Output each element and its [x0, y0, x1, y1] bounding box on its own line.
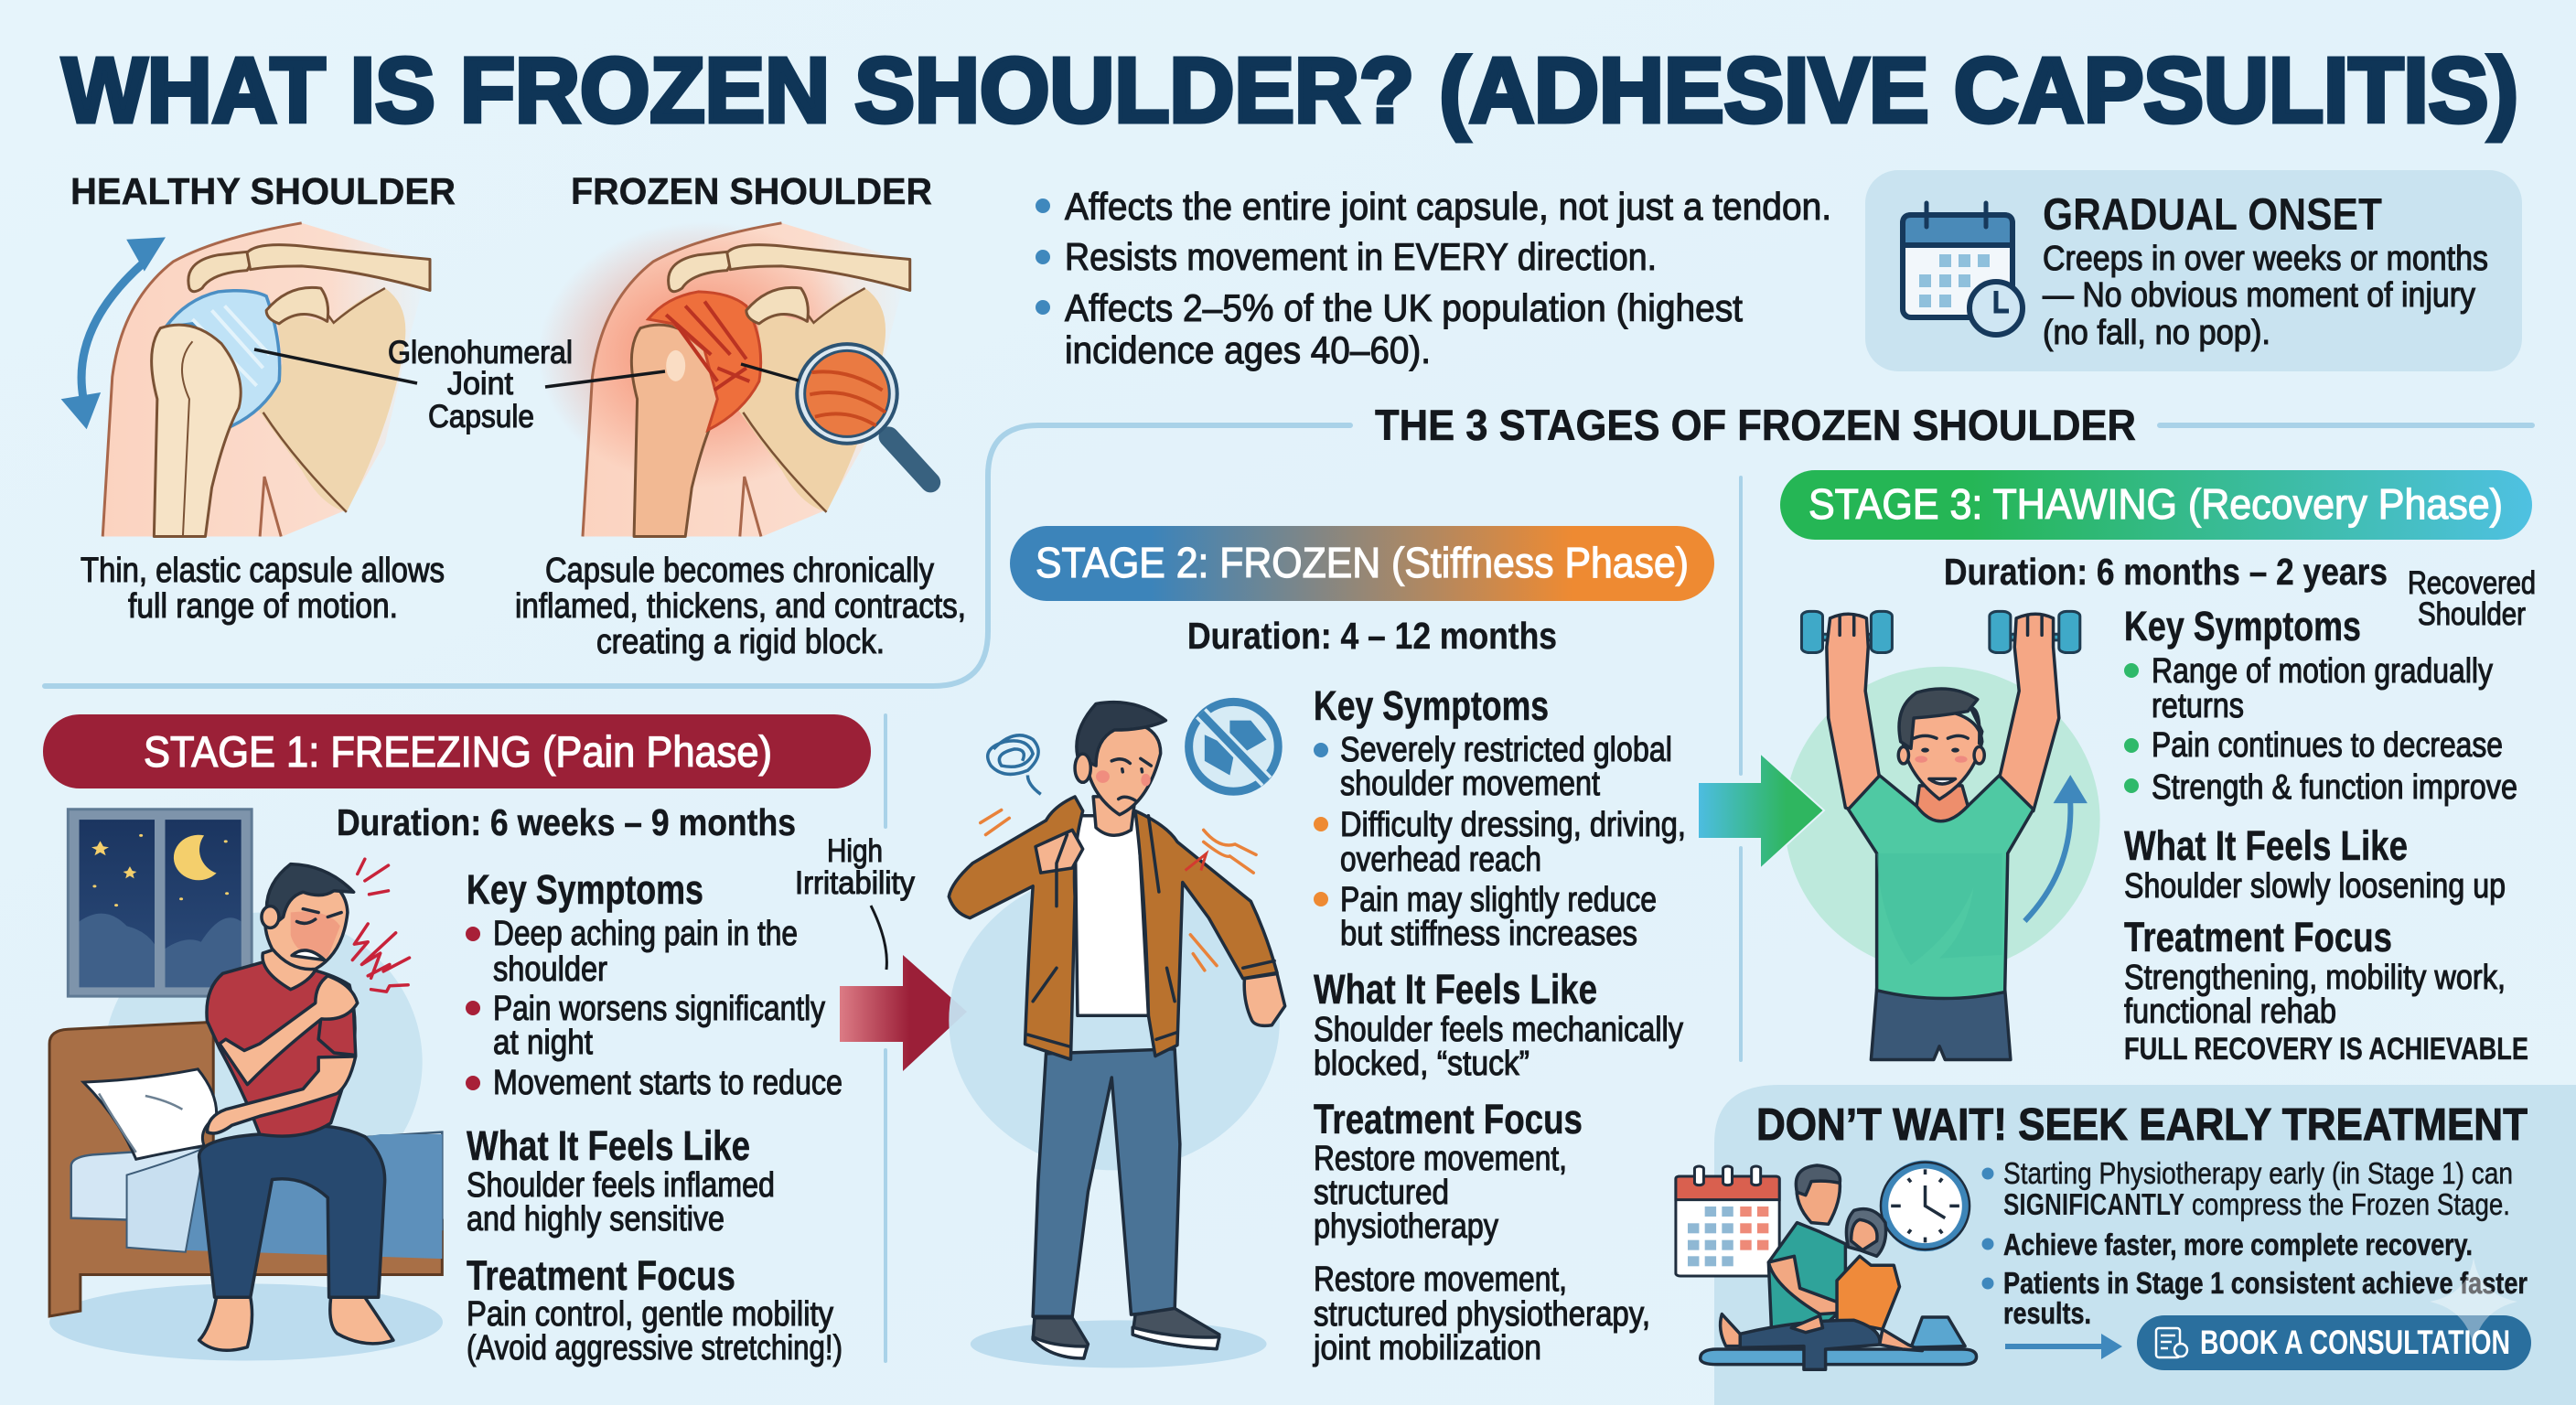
stage 3 what it feels like	[2124, 822, 2506, 906]
stage 3 treatment focus: Treatment Focus	[2124, 914, 2392, 960]
stage 2 treatment focus: Restore movement,	[1314, 1140, 1567, 1178]
label: glenohumeral joint capsule: Joint	[447, 366, 513, 402]
stage 3 treatment focus: Strengthening, mobility work,	[2124, 959, 2506, 997]
panel: gradual onset	[1865, 170, 2522, 371]
stage 1 what it feels like: What It Feels Like	[467, 1122, 750, 1169]
stage 1 key symptoms	[466, 866, 843, 1102]
panel: gradual onset: Creeps in over weeks or months	[2043, 240, 2488, 278]
button: book a consultation	[2137, 1315, 2531, 1370]
early treatment bullets: results.	[2003, 1296, 2091, 1330]
decorative sparkle mark	[2430, 1258, 2517, 1346]
panel: don't wait, seek early treatment	[1676, 1085, 2576, 1405]
key facts list: Resists movement in EVERY direction.	[1065, 235, 1657, 278]
stage 2 key symptoms: but stiffness increases	[1340, 915, 1637, 953]
panel: gradual onset: GRADUAL ONSET	[2043, 190, 2382, 240]
callout lines: capsule pointers	[254, 349, 799, 387]
stage 1 what it feels like	[467, 1122, 775, 1239]
stage 2 key symptoms	[1314, 682, 1686, 953]
stage 3 pill	[1780, 470, 2532, 540]
stage 2 key symptoms: Key Symptoms	[1314, 682, 1549, 729]
label: recovered shoulder: Recovered	[2408, 565, 2536, 601]
caption: frozen shoulder	[515, 552, 966, 661]
icon: magnifying glass	[797, 344, 930, 482]
stage 3 treatment focus	[2124, 914, 2528, 1067]
stage 2 treatment focus	[1313, 1096, 1650, 1367]
icon: clipboard	[2156, 1328, 2187, 1357]
stage 1 key symptoms: shoulder	[493, 950, 607, 989]
stage 2 key symptoms: Difficulty dressing, driving,	[1340, 806, 1686, 844]
label: recovered shoulder: Shoulder	[2418, 596, 2526, 632]
label: glenohumeral joint capsule	[388, 335, 573, 434]
heading: the 3 stages: THE 3 STAGES OF FROZEN SHOULDER	[1375, 401, 2136, 449]
key facts list: Affects 2–5% of the UK population (highest	[1065, 286, 1743, 329]
stage 1 duration: Duration: 6 weeks – 9 months	[337, 801, 796, 843]
stage 2 key symptoms: shoulder movement	[1340, 765, 1600, 803]
stage 1 key symptoms: at night	[493, 1024, 593, 1062]
panel frame: anatomy section divider	[45, 425, 2532, 686]
label: recovered shoulder	[2408, 565, 2536, 632]
early treatment bullets: compress the Frozen Stage.	[2192, 1187, 2510, 1221]
window	[68, 810, 252, 996]
stage 1 pill	[43, 714, 871, 788]
stage 3 key symptoms: Range of motion gradually	[2152, 652, 2493, 691]
stage 1 key symptoms: Movement starts to reduce	[493, 1064, 843, 1102]
stiffness marks	[981, 810, 1256, 971]
icon: upward motion arrow	[2024, 775, 2088, 921]
arrow: stage 1 to stage 2	[840, 955, 967, 1071]
stage 1 pill: STAGE 1: FREEZING (Pain Phase)	[144, 727, 772, 776]
stage 3 what it feels like: Shoulder slowly loosening up	[2124, 867, 2506, 906]
stage 3 key symptoms	[2124, 603, 2517, 807]
illustration: frozen shoulder	[538, 221, 930, 536]
stage 2 treatment focus: joint mobilization	[1313, 1329, 1541, 1367]
illustration: stage 3 recovered man	[1785, 611, 2100, 1060]
stage 2 treatment focus: physiotherapy	[1314, 1207, 1498, 1246]
stage 3 key symptoms: Key Symptoms	[2124, 603, 2361, 649]
stage 3 treatment focus: functional rehab	[2124, 992, 2336, 1031]
stage 2 what it feels like: What It Feels Like	[1314, 966, 1597, 1013]
stage 2 key symptoms: Severely restricted global	[1340, 731, 1672, 769]
early treatment bullets: Achieve faster, more complete recovery.	[2003, 1228, 2473, 1261]
stage 2 duration: Duration: 4 – 12 months	[1187, 615, 1557, 657]
stage 1 treatment focus: (Avoid aggressive stretching!)	[467, 1329, 843, 1367]
stage 1 treatment focus: Treatment Focus	[467, 1252, 735, 1299]
stage 2 treatment focus: Restore movement,	[1314, 1260, 1567, 1299]
stage 2 treatment focus: Treatment Focus	[1314, 1096, 1583, 1142]
illustration: healthy shoulder	[61, 223, 430, 536]
man	[199, 864, 393, 1350]
stage dividers	[886, 477, 1741, 1361]
arrow to button	[2005, 1334, 2122, 1359]
stage 2 pill: STAGE 2: FROZEN (Stiffness Phase)	[1036, 539, 1689, 586]
arrow: stage 2 to stage 3	[1698, 753, 1824, 869]
icon: no-movement sign	[1189, 702, 1278, 791]
heading: frozen shoulder: FROZEN SHOULDER	[571, 170, 932, 212]
stage 1 key symptoms: Key Symptoms	[467, 866, 703, 913]
stage 2 key symptoms: overhead reach	[1340, 841, 1541, 879]
stage 3 key symptoms: Pain continues to decrease	[2152, 726, 2503, 765]
heading: healthy shoulder: HEALTHY SHOULDER	[70, 170, 456, 212]
stage 2 pill	[1010, 526, 1714, 601]
pain marks	[352, 859, 410, 992]
panel: gradual onset: (no fall, no pop).	[2043, 314, 2270, 352]
stage 2 treatment focus: structured physiotherapy,	[1314, 1295, 1650, 1334]
early treatment bullets: SIGNIFICANTLY	[2003, 1187, 2184, 1221]
early treatment bullets	[1981, 1156, 2528, 1330]
key facts list	[1036, 185, 1831, 371]
stage 2 what it feels like	[1314, 966, 1683, 1083]
label: glenohumeral joint capsule: Capsule	[428, 399, 534, 434]
stage 2 key symptoms: Pain may slightly reduce	[1340, 881, 1657, 919]
caption: frozen shoulder: inflamed, thickens, and contracts,	[515, 587, 966, 626]
key facts list: incidence ages 40–60).	[1065, 328, 1431, 371]
title: WHAT IS FROZEN SHOULDER? (ADHESIVE CAPSULITIS)	[62, 39, 2518, 142]
stage 1 key symptoms: Deep aching pain in the	[493, 915, 798, 953]
illustration: stage 2 stiff man	[949, 702, 1285, 1367]
caption: frozen shoulder: creating a rigid block.	[596, 623, 885, 661]
illustration: stage 1 man on bed	[49, 810, 443, 1361]
stage 2 what it feels like: Shoulder feels mechanically	[1314, 1011, 1683, 1049]
caption: healthy shoulder	[80, 552, 445, 626]
label: high irritability	[795, 833, 915, 970]
stage 3 key symptoms: returns	[2152, 687, 2244, 725]
dumbbells	[1801, 611, 2080, 653]
caption: healthy shoulder: full range of motion.	[128, 587, 398, 626]
icon: scribble	[988, 735, 1041, 794]
caption: healthy shoulder: Thin, elastic capsule allows	[80, 552, 445, 590]
stage 3 duration: Duration: 6 months – 2 years	[1944, 551, 2388, 593]
stage 3 key symptoms: Strength & function improve	[2152, 768, 2517, 807]
illustration: physio with patient, calendar and clock	[1676, 1163, 1977, 1369]
bed	[49, 1022, 442, 1316]
key facts list: Affects the entire joint capsule, not just a tendon.	[1065, 185, 1831, 228]
stage 1 what it feels like: and highly sensitive	[467, 1200, 724, 1239]
label: high irritability: High	[827, 833, 883, 869]
label: high irritability: Irritability	[795, 865, 915, 901]
stage 1 treatment focus: Pain control, gentle mobility	[467, 1295, 833, 1334]
panel: gradual onset: — No obvious moment of injury	[2043, 276, 2475, 315]
stage 1 what it feels like: Shoulder feels inflamed	[467, 1166, 775, 1205]
stage 1 treatment focus	[467, 1252, 843, 1367]
stage 3 pill: STAGE 3: THAWING (Recovery Phase)	[1809, 480, 2503, 528]
icon: calendar and clock	[1903, 203, 2023, 335]
label: glenohumeral joint capsule: Glenohumeral	[388, 335, 573, 370]
stage 2 what it feels like: blocked, “stuck”	[1314, 1045, 1530, 1083]
caption: frozen shoulder: Capsule becomes chronically	[545, 552, 934, 590]
stage 3 what it feels like: What It Feels Like	[2124, 822, 2408, 869]
stage 2 treatment focus: structured	[1314, 1174, 1449, 1212]
stage 1 key symptoms: Pain worsens significantly	[493, 990, 825, 1028]
